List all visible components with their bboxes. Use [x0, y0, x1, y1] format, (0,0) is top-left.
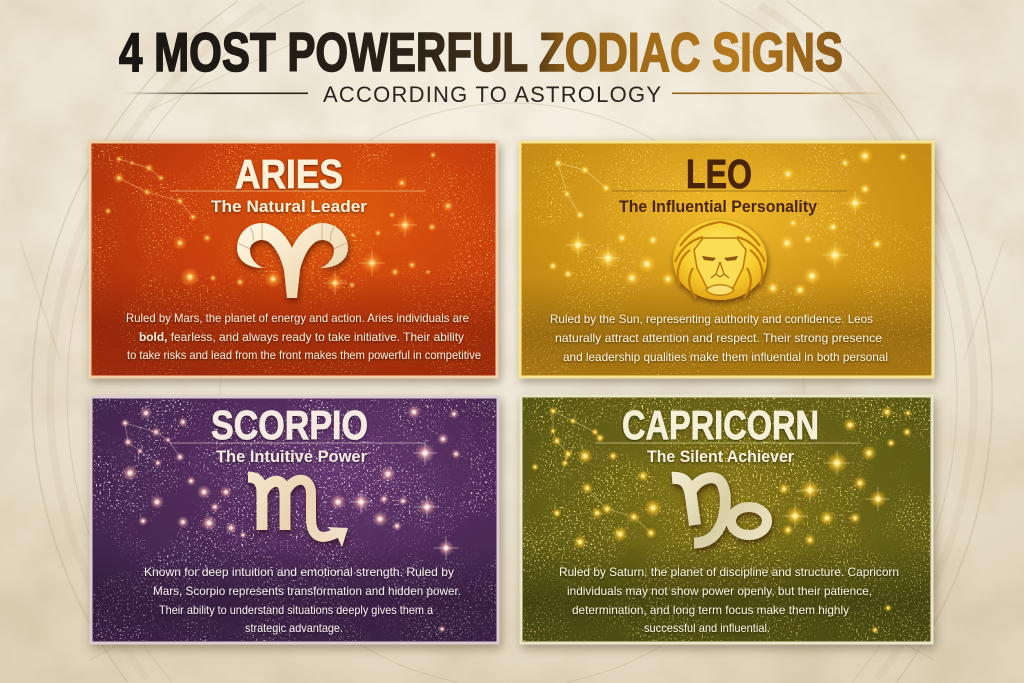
body text: Aries: Ruled by Mars, the planet of energy and action. Aries individuals are — [126, 311, 469, 325]
icon: Scorpio glyph — [248, 477, 348, 547]
body text: Capricorn: individuals may not show power openly, but their patience, — [567, 584, 872, 598]
body text: Leo: and leadership qualities make them influential in both personal — [563, 350, 888, 364]
heading: SCORPIO: SCORPIO — [211, 402, 368, 448]
body text: Leo — [550, 312, 888, 364]
stars: Aries — [104, 151, 454, 295]
body text: Capricorn: determination, and long term focus make them highly — [572, 603, 849, 617]
body text: Capricorn: successful and influential. — [644, 621, 770, 635]
constellation: Leo — [554, 158, 611, 220]
panel: Capricorn — [521, 396, 932, 643]
subheading: The Intuitive Power: The Intuitive Power — [216, 448, 368, 466]
body text: Scorpio: Mars, Scorpio represents transformation and hidden power. — [153, 584, 461, 598]
body text: Scorpio: strategic advantage. — [245, 621, 343, 635]
body text: Leo: naturally attract attention and respect. Their strong presence — [555, 331, 882, 345]
stars: Capricorn — [531, 406, 912, 634]
subheading: The Silent Achiever: The Silent Achiever — [647, 448, 795, 466]
icon: Capricorn glyph — [672, 478, 767, 543]
heading: CAPRICORN: CAPRICORN — [622, 402, 819, 448]
panel: Leo — [520, 142, 933, 377]
subheading: The Influential Personality: The Influential Personality — [619, 198, 818, 216]
heading: LEO: LEO — [686, 151, 752, 197]
icon: Leo lion head — [673, 220, 767, 300]
body text: Capricorn: Ruled by Saturn, the planet of discipline and structure. Capricorn — [559, 565, 899, 579]
subtitle with rules: ACCORDING TO ASTROLOGY — [323, 82, 661, 107]
body text: Leo: Ruled by the Sun, representing authority and confidence. Leos — [550, 312, 873, 326]
heading: ARIES: ARIES — [235, 151, 343, 197]
body text: Aries: to take risks and lead from the front makes them powerful in competitive — [127, 348, 481, 362]
body text: Capricorn — [559, 565, 899, 635]
body text: Scorpio: Known for deep intuition and emotional strength. Ruled by — [144, 565, 454, 579]
constellation: Capricorn — [548, 406, 657, 539]
stars: Scorpio — [122, 405, 461, 633]
body text: Scorpio: Their ability to understand situations deeply gives them a — [159, 603, 433, 617]
constellation: Aries — [113, 155, 198, 222]
body text: Aries — [126, 311, 481, 362]
panel: Aries — [90, 142, 497, 377]
constellation: Scorpio — [120, 418, 185, 467]
body text: Aries: bold, fearless, and always ready to take initiative. Their ability — [139, 330, 464, 344]
subheading: The Natural Leader: The Natural Leader — [211, 198, 368, 216]
panel: Scorpio — [91, 397, 498, 643]
body text: Scorpio — [144, 565, 461, 635]
icon: Aries ram horns — [237, 223, 348, 298]
stars: Leo — [548, 148, 908, 297]
